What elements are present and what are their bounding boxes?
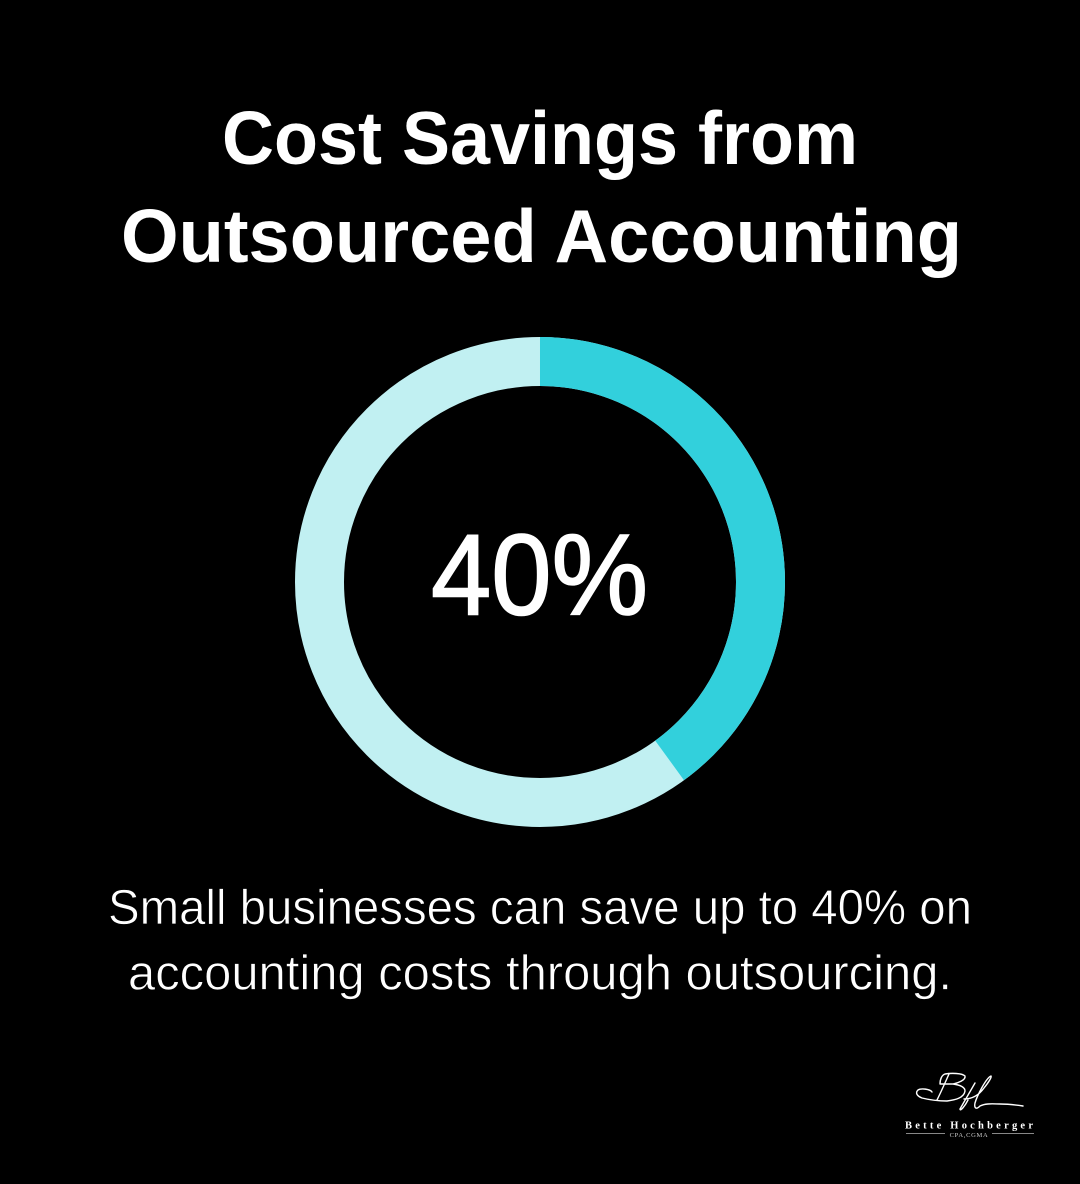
logo divider left <box>906 1133 945 1134</box>
description text: accounting costs through outsourcing. <box>128 946 952 1000</box>
title: Cost Savings from <box>222 96 858 180</box>
donut highlighted 40% segment <box>540 362 761 760</box>
title: Outsourced Accounting <box>121 194 962 278</box>
logo name: Bette Hochberger <box>905 1120 1033 1132</box>
description text: Small businesses can save up to 40% on <box>108 881 972 935</box>
logo: Bette Hochberger <box>905 1073 1034 1139</box>
donut remainder segment <box>320 362 760 802</box>
logo divider right <box>992 1133 1034 1134</box>
donut chart: 40% <box>320 362 761 802</box>
description text <box>108 881 972 1000</box>
title <box>121 96 962 278</box>
icon: signature monogram <box>917 1073 1023 1110</box>
center value: 40% <box>431 512 648 640</box>
logo credentials: CPA,CGMA <box>950 1132 988 1139</box>
